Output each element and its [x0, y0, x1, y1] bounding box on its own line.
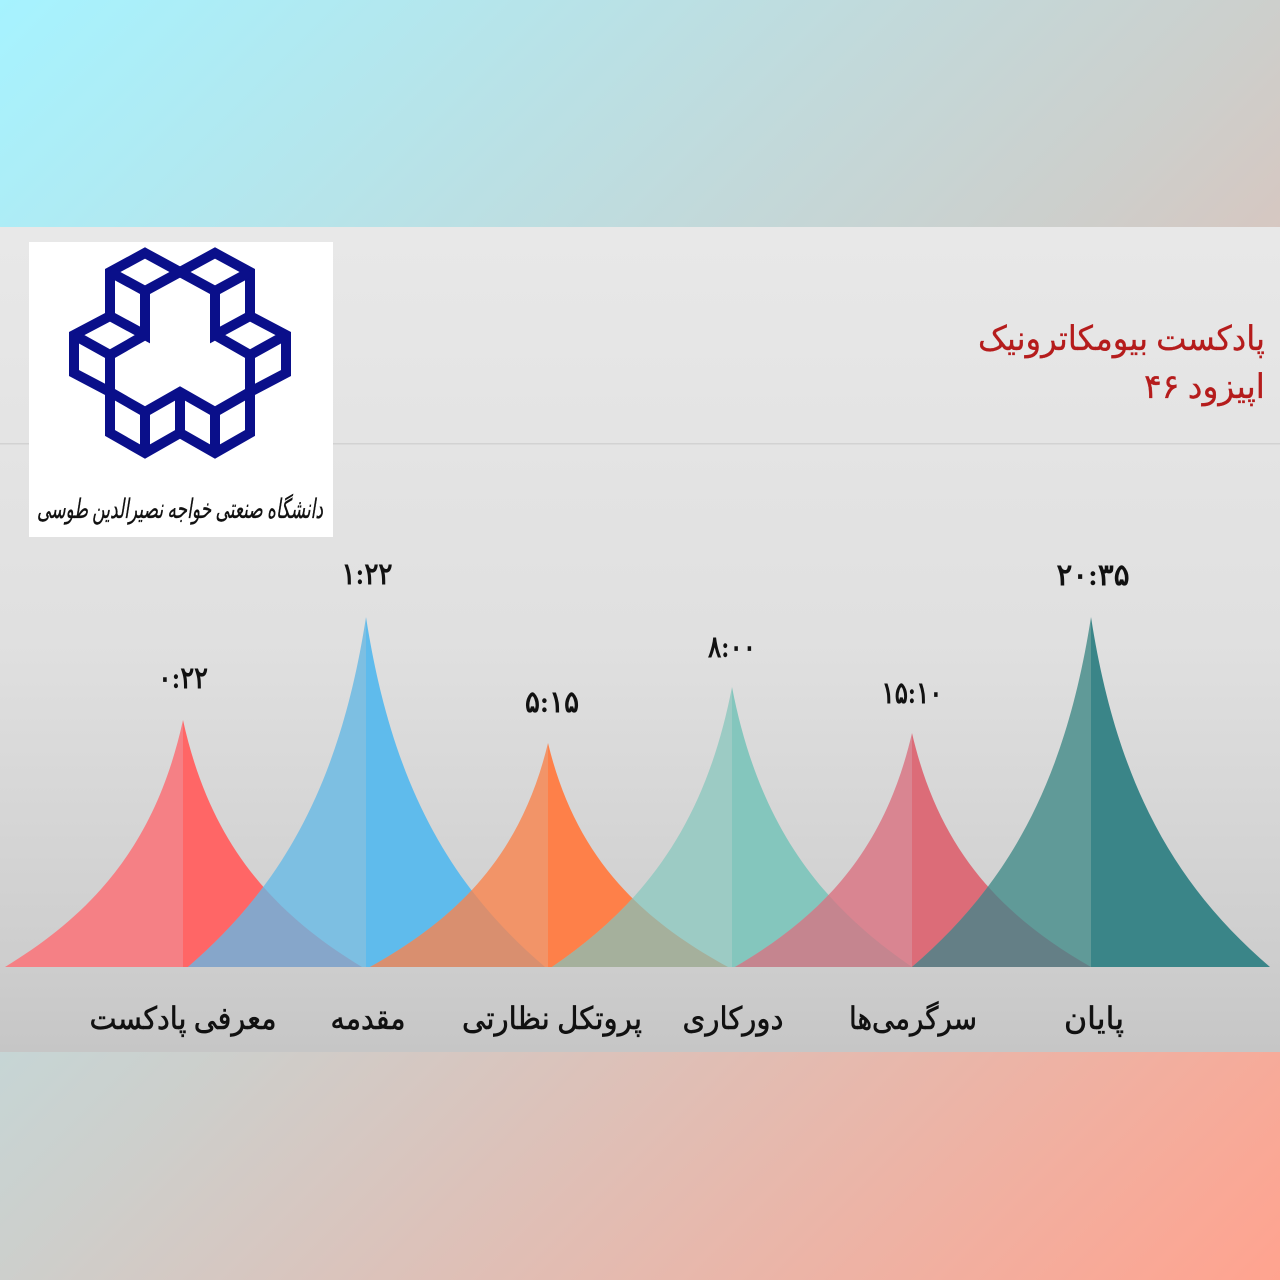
timestamps: ۱۵:۱۰	[882, 677, 942, 710]
timestamps: ۱:۲۲	[342, 558, 392, 591]
segment labels: مقدمه	[330, 1001, 406, 1036]
central grey panel	[0, 227, 1280, 1052]
university name: دانشگاه صنعتی خواجه نصیرالدین طوسی	[37, 493, 324, 525]
podcast title: اپیزود ۴۶	[1144, 369, 1265, 407]
timestamps	[158, 558, 1130, 719]
timestamps: ۵:۱۵	[525, 686, 579, 719]
peak: introduction	[188, 617, 472, 967]
peak chart	[5, 617, 1270, 967]
segment labels: پایان	[1064, 1001, 1124, 1037]
segment labels	[90, 1001, 1124, 1037]
peak: hobbies	[735, 733, 988, 967]
peak: remote work	[552, 687, 828, 967]
segment labels: سرگرمی‌ها	[849, 1001, 977, 1037]
segment labels: دورکاری	[682, 1001, 784, 1037]
segment labels: پروتکل نظارتی	[462, 1001, 642, 1037]
podcast title: پادکست بیومکاترونیک	[978, 321, 1265, 359]
icon: university emblem	[74, 253, 286, 453]
peak: monitoring protocol	[370, 743, 632, 967]
timestamps: ۸:۰۰	[708, 631, 756, 664]
segment labels: معرفی پادکست	[90, 1001, 276, 1037]
peak: ending	[912, 617, 1270, 967]
podcast title	[978, 321, 1265, 407]
peak: podcast intro	[5, 720, 362, 967]
timestamps: ۲۰:۳۵	[1056, 559, 1130, 592]
university logo	[29, 242, 333, 537]
timestamps: ۰:۲۲	[158, 662, 208, 695]
